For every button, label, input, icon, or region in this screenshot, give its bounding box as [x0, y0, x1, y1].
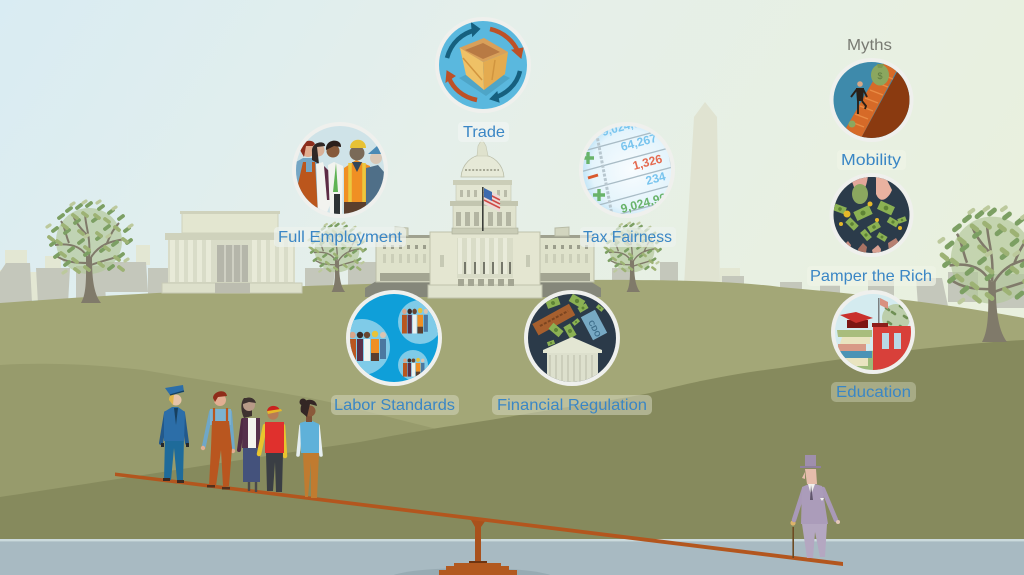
label: Mobility: Mobility — [841, 152, 901, 169]
label: Financial Regulation: Financial Regulation — [497, 397, 647, 414]
hill: far light green — [0, 280, 1024, 575]
icon: workers in bubbles — [346, 290, 442, 386]
icon: ledger sheet: 64,267 — [619, 131, 659, 154]
label: Education: Education — [836, 384, 911, 401]
hill: mid green left — [0, 364, 520, 575]
city skyline — [0, 245, 1024, 308]
label: Labor Standards: Labor Standards — [334, 397, 455, 414]
badge: Pamper the Rich — [807, 173, 936, 286]
icon: bank with flying money: CDO — [586, 319, 603, 339]
monument: US Capitol with flag — [365, 139, 601, 298]
icon: ledger sheet: 234 — [644, 169, 667, 188]
seesaw fulcrum — [390, 520, 554, 575]
badge: Financial Regulation — [492, 290, 652, 415]
water strip — [0, 539, 1024, 575]
monument: Washington Monument — [684, 102, 720, 286]
badge: Trade — [435, 17, 531, 142]
icon: man climbing stairs toward money: $ — [877, 71, 883, 81]
figure: overalls worker — [201, 391, 235, 490]
label: Trade: Trade — [463, 124, 505, 141]
icon: crate with trade arrows — [435, 17, 531, 113]
figure: woman in skirt — [239, 397, 260, 492]
icon: bank with flying money — [524, 290, 620, 386]
figure: woman in blue top — [298, 398, 321, 498]
tree: front right — [940, 207, 1024, 342]
icon: ledger sheet — [579, 122, 674, 218]
label: Tax Fairness: Tax Fairness — [583, 229, 672, 246]
tree: back left — [47, 201, 132, 303]
icon: books, cap and school — [830, 290, 915, 375]
seesaw beam — [115, 472, 843, 566]
label: Full Employment: Full Employment — [278, 229, 403, 246]
badge: Labor Standards — [331, 290, 459, 415]
label: Pamper the Rich: Pamper the Rich — [810, 268, 932, 285]
badge: Education — [830, 290, 916, 402]
figure: rich man in top hat with cane — [790, 455, 840, 558]
figure: police officer — [161, 385, 189, 483]
icon: ledger sheet: 9,024,9 — [601, 117, 641, 139]
figure: retail worker in red — [259, 406, 285, 492]
tree: behind full employment — [308, 223, 366, 292]
icon: group of workers — [292, 122, 388, 218]
icon: ledger sheet: 9,024,96 — [619, 190, 668, 216]
badge: Tax Fairness — [579, 117, 680, 247]
monument: Lincoln Memorial — [162, 211, 302, 293]
icon: American flag — [482, 187, 500, 231]
icon: money falling from rich hands — [830, 173, 914, 258]
tree: behind tax fairness — [603, 223, 661, 292]
badge: Full Employment — [274, 122, 406, 247]
badge: Mobility — [830, 58, 915, 170]
people: workers on the low side — [161, 385, 321, 498]
heading: Myths: Myths — [847, 37, 892, 54]
icon: ledger sheet: 1,326 — [631, 152, 664, 173]
hill: near dark green — [0, 340, 1024, 575]
